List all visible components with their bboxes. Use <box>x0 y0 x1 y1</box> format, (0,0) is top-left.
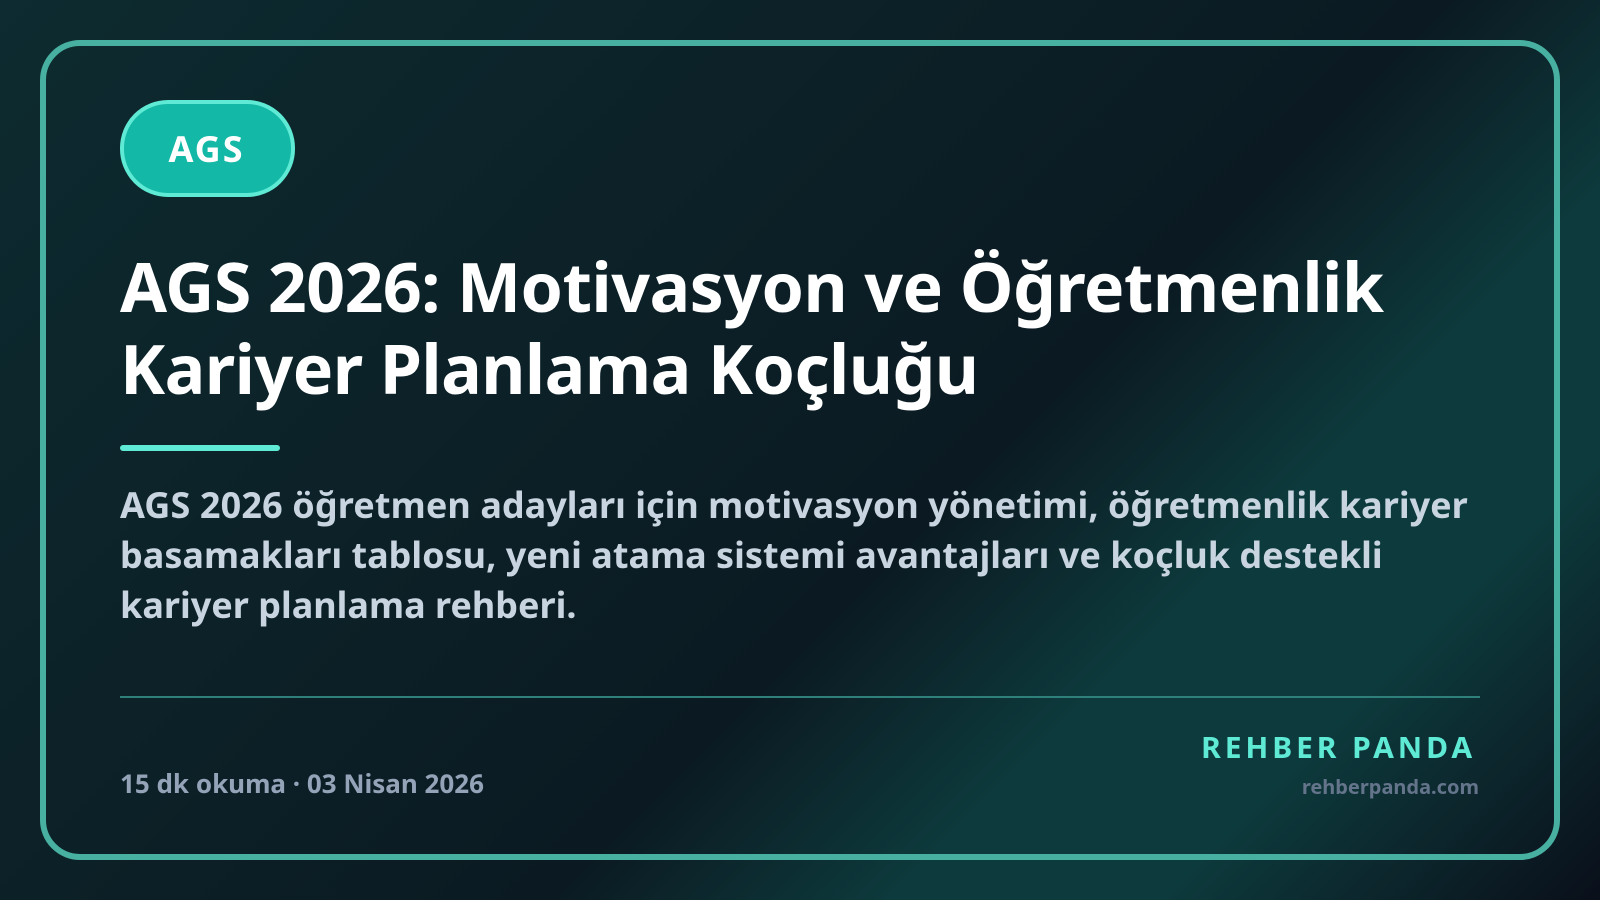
accent rule <box>120 445 280 451</box>
website: rehberpanda.com <box>1302 773 1479 800</box>
reading time and date: 15 dk okuma · 03 Nisan 2026 <box>120 765 484 801</box>
brand block <box>1201 726 1479 800</box>
title <box>120 239 1384 414</box>
description text: kariyer planlama rehberi. <box>120 580 576 629</box>
description text: AGS 2026 öğretmen adayları için motivasyon yönetimi, öğretmenlik kariyer <box>120 480 1468 529</box>
title: AGS 2026: Motivasyon ve Öğretmenlik <box>120 239 1383 332</box>
description text: basamakları tablosu, yeni atama sistemi avantajları ve koçluk destekli <box>120 530 1383 579</box>
title: Kariyer Planlama Koçluğu <box>120 321 978 414</box>
description text <box>120 480 1468 629</box>
badge: AGS <box>120 100 295 197</box>
footer divider <box>120 696 1480 698</box>
brand name: REHBER PANDA <box>1201 726 1476 767</box>
badge: AGS: AGS <box>168 124 245 173</box>
